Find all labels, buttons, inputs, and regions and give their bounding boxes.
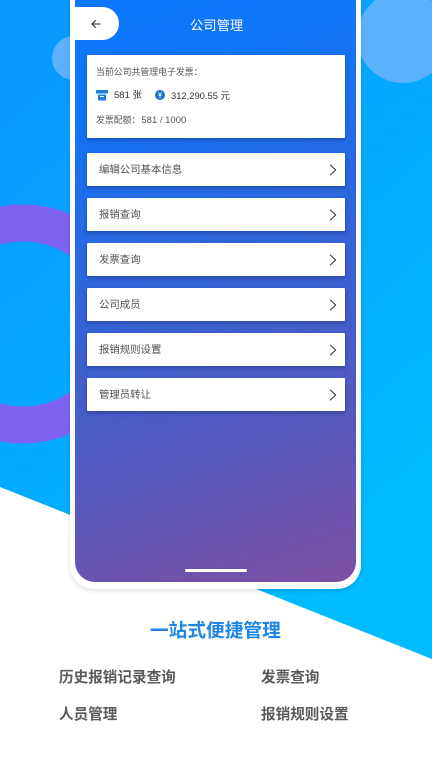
feature: personnel: 人员管理 <box>59 707 117 723</box>
back button <box>70 7 119 40</box>
menu row: expense rules <box>87 333 345 366</box>
menu row: expense query: 报销查询 <box>99 210 141 221</box>
menu row: admin transfer: 管理员转让 <box>99 390 151 401</box>
screen title: 公司管理 <box>190 18 243 33</box>
invoice count: 581 张 <box>114 90 142 101</box>
menu row: admin transfer <box>87 378 345 411</box>
phone screen <box>75 0 356 582</box>
feature: invoice query: 发票查询 <box>261 670 319 686</box>
menu row: members <box>87 288 345 321</box>
phone mockup <box>70 0 361 589</box>
menu row: expense rules: 报销规则设置 <box>99 345 161 356</box>
menu row: members: 公司成员 <box>99 300 141 311</box>
icon: yen coin <box>155 90 165 100</box>
invoice amount: 312,290.55 元 <box>171 90 230 101</box>
icon: back arrow <box>91 20 100 28</box>
icon: invoice <box>96 90 108 100</box>
invoice quota: 发票配额：581 / 1000 <box>96 115 186 126</box>
main heading: 一站式便捷管理 <box>150 620 281 641</box>
menu row: expense query <box>87 198 345 231</box>
menu row: company info <box>87 153 345 186</box>
card heading: 当前公司共管理电子发票： <box>96 67 202 77</box>
menu row: company info: 编辑公司基本信息 <box>99 165 182 176</box>
feature: history query: 历史报销记录查询 <box>59 670 176 686</box>
menu row: invoice query <box>87 243 345 276</box>
summary card <box>87 55 345 138</box>
menu row: invoice query: 发票查询 <box>99 255 141 266</box>
feature: expense rules: 报销规则设置 <box>261 707 349 723</box>
home indicator <box>185 569 247 572</box>
